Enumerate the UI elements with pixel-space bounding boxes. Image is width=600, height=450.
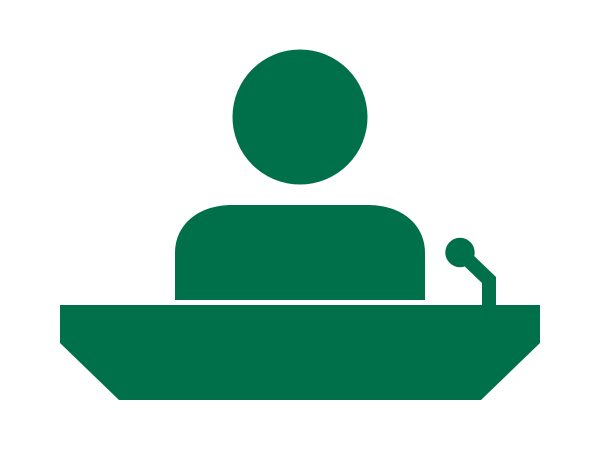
icon: microphone [445,238,496,306]
speaker head [232,50,368,184]
podium [60,305,540,400]
speaker torso [175,205,425,300]
